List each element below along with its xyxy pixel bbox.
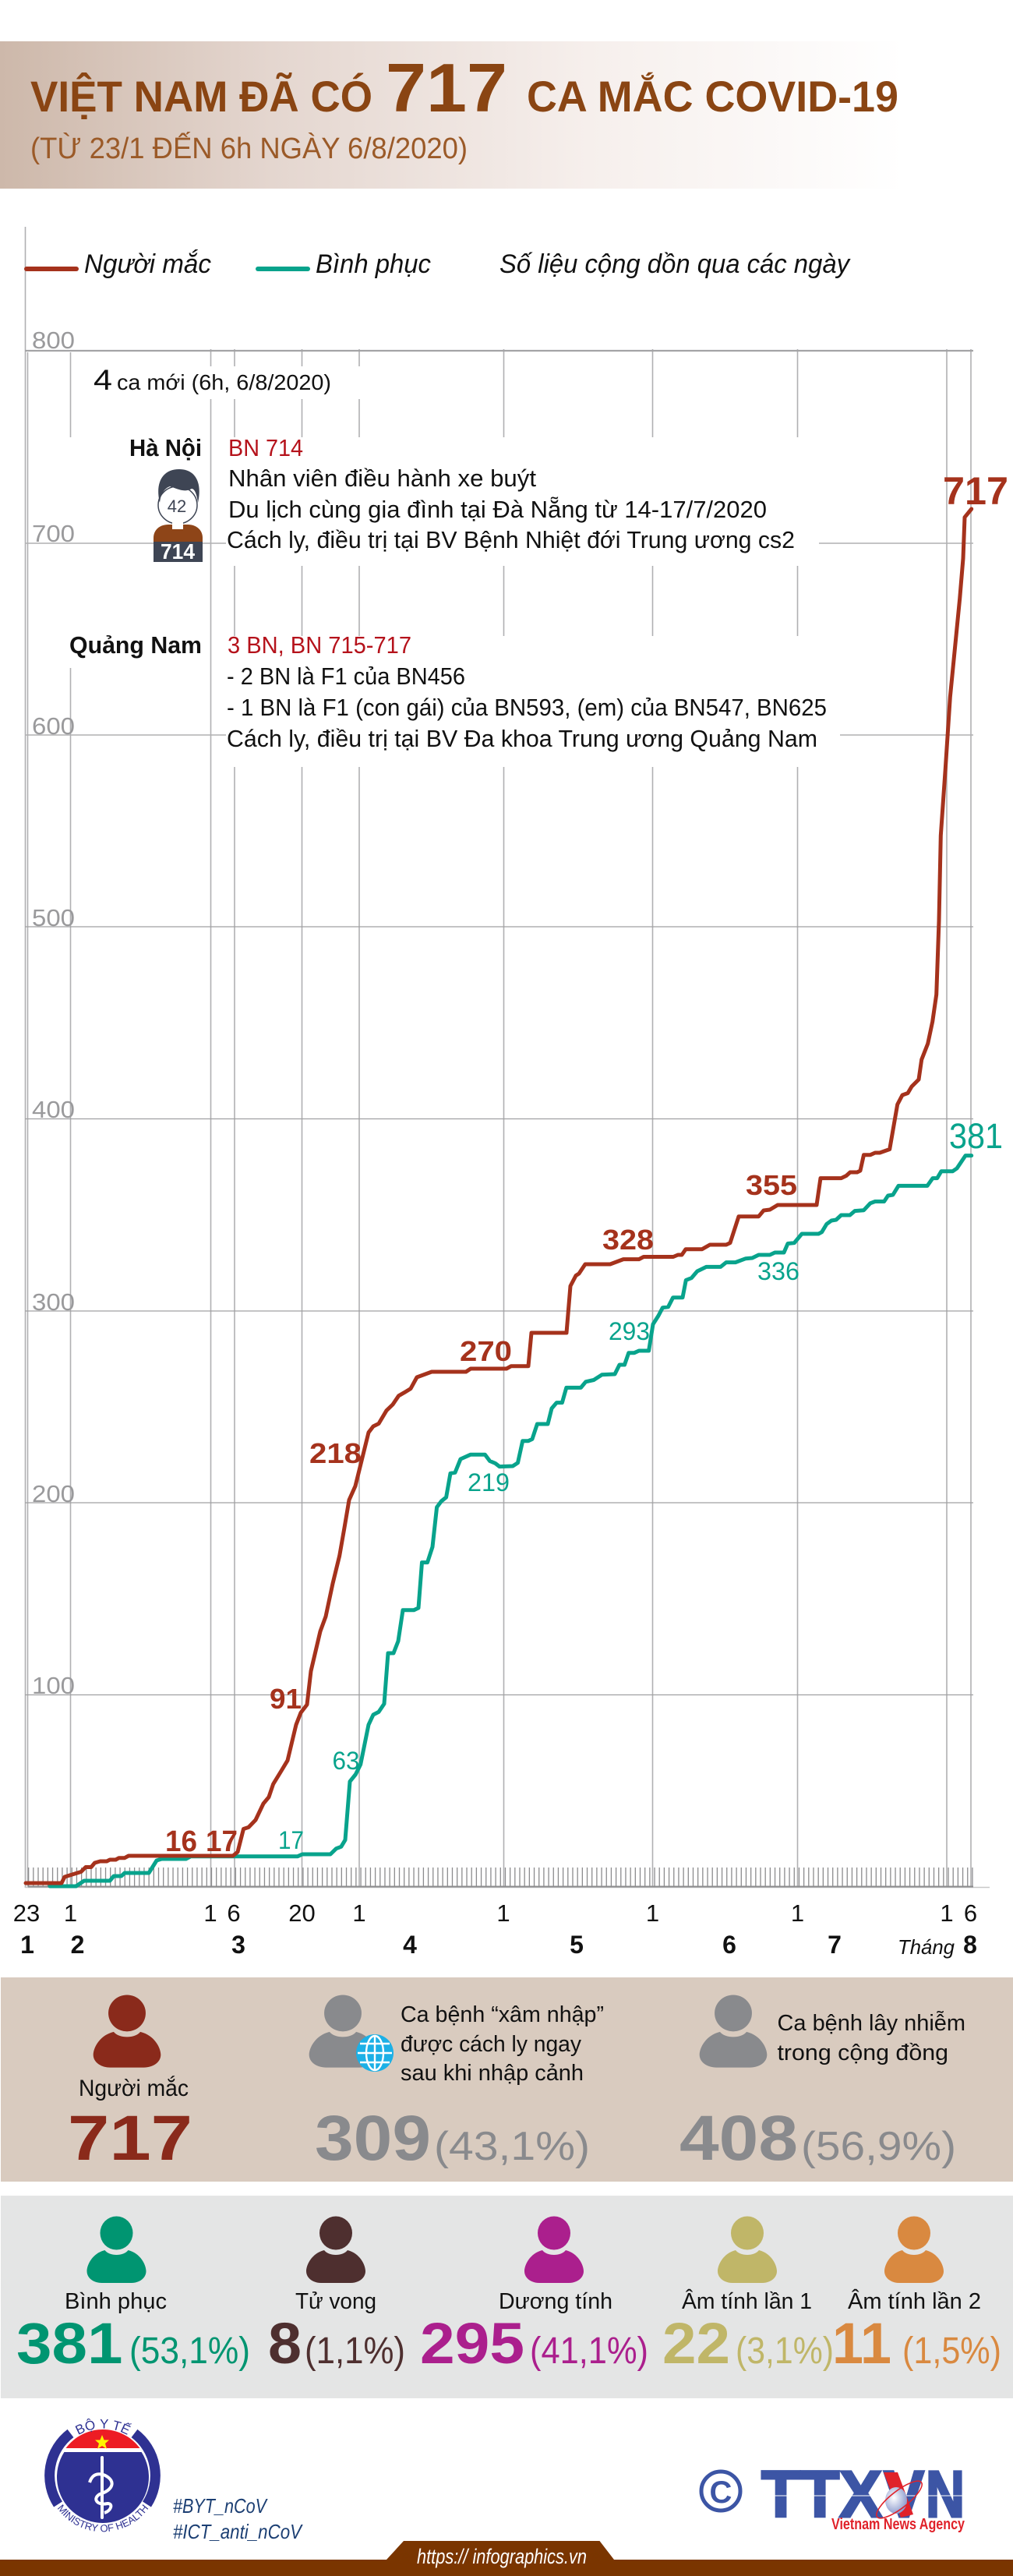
stat: deaths: 8: [268, 2311, 302, 2376]
stat: imported cases: [309, 1995, 604, 2174]
stat: deaths: Tử vong: [295, 2289, 376, 2314]
logo: TTXVN: Vietnam News Agency: [831, 2516, 965, 2533]
logo: TTXVN: TTX: [761, 2458, 882, 2531]
icon: patient 714 avatar: 42: [168, 496, 186, 516]
new cases headline: 4: [94, 364, 112, 396]
stat: positive: [420, 2217, 648, 2376]
stat: community cases: Ca bệnh lây nhiễm: [778, 2010, 965, 2036]
recovered value labels: 381: [949, 1116, 1003, 1156]
x axis month labels: 1: [20, 1931, 34, 1959]
x axis month labels: 4: [403, 1931, 417, 1959]
stat: confirmed total: [68, 1995, 192, 2174]
title: CA MẮC COVID-19: [527, 72, 898, 121]
recovered value labels: 219: [468, 1468, 510, 1496]
panel: total cases: [1, 1977, 1013, 2182]
stat: positive: Dương tính: [499, 2289, 612, 2314]
stat: negative once: 22: [662, 2311, 730, 2376]
callout: Hanoi case: Du lịch cùng gia đình tại Đà Nẵng từ 14-17/7/2020: [228, 496, 767, 523]
x axis month labels: 2: [71, 1931, 84, 1959]
stat: negative once: [662, 2217, 834, 2376]
recovered value labels: 63: [332, 1747, 360, 1775]
title: [30, 49, 898, 126]
y axis labels: [32, 327, 75, 1699]
stat: imported cases: Ca bệnh “xâm nhập”: [401, 2002, 604, 2027]
logo: TTXVN: [701, 2458, 965, 2533]
callout: Quang Nam cases: Cách ly, điều trị tại BV Đa khoa Trung ương Quảng Nam: [227, 725, 817, 752]
confirmed value labels: 16: [165, 1825, 197, 1858]
stat: confirmed total: 717: [68, 2103, 192, 2174]
y axis labels: 400: [32, 1096, 75, 1123]
confirmed value labels: [165, 469, 1008, 1858]
logo: Ministry of Health: [44, 2418, 161, 2532]
stat: imported cases: sau khi nhập cảnh: [401, 2061, 584, 2086]
stat: recovered: (53,1%): [129, 2330, 250, 2372]
callout: Quang Nam cases: 3 BN, BN 715-717: [228, 631, 411, 659]
legend: Người mắc: [84, 249, 211, 279]
confirmed value labels: 91: [270, 1683, 302, 1715]
x axis day labels: 23: [13, 1899, 40, 1927]
x axis day labels: 1: [64, 1899, 77, 1927]
callout: Hanoi case: [129, 434, 795, 553]
x axis day labels: 1: [646, 1899, 659, 1927]
stat: deaths: [268, 2217, 405, 2376]
stat: negative once: Âm tính lần 1: [682, 2288, 812, 2314]
x axis month labels: 7: [828, 1931, 842, 1959]
callout: Quang Nam cases: - 2 BN là F1 của BN456: [227, 663, 465, 690]
footer bar: https:// infographics.vn: [417, 2545, 587, 2568]
hashtags: #BYT_nCoV: [173, 2494, 268, 2518]
stat: negative once: (3,1%): [736, 2330, 834, 2372]
stat: confirmed total: Người mắc: [79, 2076, 189, 2101]
month axis caption: Tháng: [898, 1935, 955, 1959]
new cases headline: [94, 364, 331, 396]
panel: outcomes: [1, 2196, 1013, 2398]
legend: Số liệu cộng dồn qua các ngày: [499, 249, 851, 279]
callout: Hanoi case: BN 714: [228, 434, 303, 461]
stat: positive: (41,1%): [530, 2330, 648, 2372]
title: 717: [386, 49, 507, 126]
y axis labels: 800: [32, 327, 75, 354]
y axis labels: 200: [32, 1480, 75, 1507]
title: VIỆT NAM ĐÃ CÓ: [30, 72, 372, 121]
stat: negative twice: Âm tính lần 2: [848, 2288, 981, 2314]
callout: Quang Nam cases: [69, 631, 827, 752]
stat: community cases: trong cộng đồng: [778, 2041, 948, 2065]
x axis day labels: 6: [964, 1899, 977, 1927]
stat: community cases: (56,9%): [801, 2124, 956, 2169]
x axis month labels: 8: [963, 1931, 977, 1959]
confirmed value labels: 717: [943, 469, 1008, 513]
x axis day labels: 1: [791, 1899, 804, 1927]
stat: community cases: 408: [679, 2103, 798, 2174]
recovered value labels: 293: [609, 1317, 650, 1345]
logo: TTXVN: C: [710, 2475, 732, 2510]
line: confirmed cases: [26, 509, 972, 1883]
recovered value labels: 336: [757, 1257, 799, 1285]
stat: recovered: Bình phục: [65, 2289, 167, 2314]
x axis day labels: 1: [203, 1899, 217, 1927]
x axis day labels: 1: [940, 1899, 954, 1927]
stat: positive: 295: [420, 2311, 524, 2376]
stat: negative twice: (1,5%): [902, 2330, 1001, 2372]
hashtags: #ICT_anti_nCoV: [173, 2520, 303, 2543]
subtitle: (TỪ 23/1 ĐẾN 6h NGÀY 6/8/2020): [30, 131, 468, 165]
icon: patient 714 avatar: [154, 469, 203, 564]
x axis month labels: 3: [231, 1931, 245, 1959]
stat: imported cases: (43,1%): [434, 2124, 590, 2169]
x axis day labels: [13, 1899, 977, 1927]
confirmed value labels: 270: [460, 1335, 512, 1367]
icon: patient 714 avatar: 714: [161, 539, 195, 564]
stat: community cases: [679, 1995, 965, 2174]
stat: imported cases: được cách ly ngay: [401, 2032, 581, 2057]
y axis labels: 500: [32, 904, 75, 931]
callout: Quang Nam cases: Quảng Nam: [69, 631, 202, 659]
logo: TTXVN: N: [926, 2458, 965, 2531]
x axis day labels: 20: [288, 1899, 316, 1927]
logo: TTXVN: V: [884, 2458, 924, 2531]
confirmed value labels: 17: [206, 1825, 238, 1858]
confirmed value labels: 218: [309, 1437, 362, 1469]
callout: Hanoi case: Nhân viên điều hành xe buýt: [228, 465, 536, 492]
x axis day labels: 1: [496, 1899, 510, 1927]
recovered value labels: [278, 1116, 1003, 1854]
logo: Ministry of Health: MINISTRY OF HEALTH: [58, 2504, 148, 2532]
line: recovered cases: [50, 1156, 972, 1886]
new cases headline: ca mới (6h, 6/8/2020): [117, 370, 331, 394]
x axis month labels: [20, 1931, 977, 1959]
stat: imported cases: 309: [315, 2103, 431, 2174]
recovered value labels: 17: [278, 1826, 304, 1854]
logo: Ministry of Health: BỘ Y TẾ: [75, 2418, 132, 2435]
stat: recovered: 381: [16, 2311, 123, 2376]
y axis labels: 700: [32, 520, 75, 547]
confirmed value labels: 355: [746, 1169, 797, 1201]
x axis month labels: 5: [570, 1931, 584, 1959]
y axis labels: 100: [32, 1672, 75, 1699]
footer bar: [0, 2541, 1013, 2576]
hashtags: [173, 2494, 303, 2543]
callout: Hanoi case: Cách ly, điều trị tại BV Bệnh Nhiệt đới Trung ương cs2: [227, 526, 795, 553]
stat: negative twice: 11: [832, 2311, 891, 2376]
x axis day labels: 1: [352, 1899, 366, 1927]
callout: Hanoi case: Hà Nội: [129, 434, 202, 461]
chart gridlines: [25, 227, 990, 1888]
y axis labels: 600: [32, 712, 75, 740]
x axis day labels: 6: [227, 1899, 241, 1927]
stat: recovered: [16, 2217, 250, 2376]
legend: [26, 249, 851, 279]
callout: Quang Nam cases: - 1 BN là F1 (con gái) của BN593, (em) của BN547, BN625: [227, 694, 827, 721]
stat: deaths: (1,1%): [305, 2330, 405, 2372]
stat: negative twice: [832, 2217, 1001, 2376]
confirmed value labels: 328: [602, 1224, 654, 1256]
x axis month labels: 6: [722, 1931, 736, 1959]
title banner: [0, 41, 904, 189]
y axis labels: 300: [32, 1288, 75, 1316]
legend: Bình phục: [316, 249, 431, 279]
